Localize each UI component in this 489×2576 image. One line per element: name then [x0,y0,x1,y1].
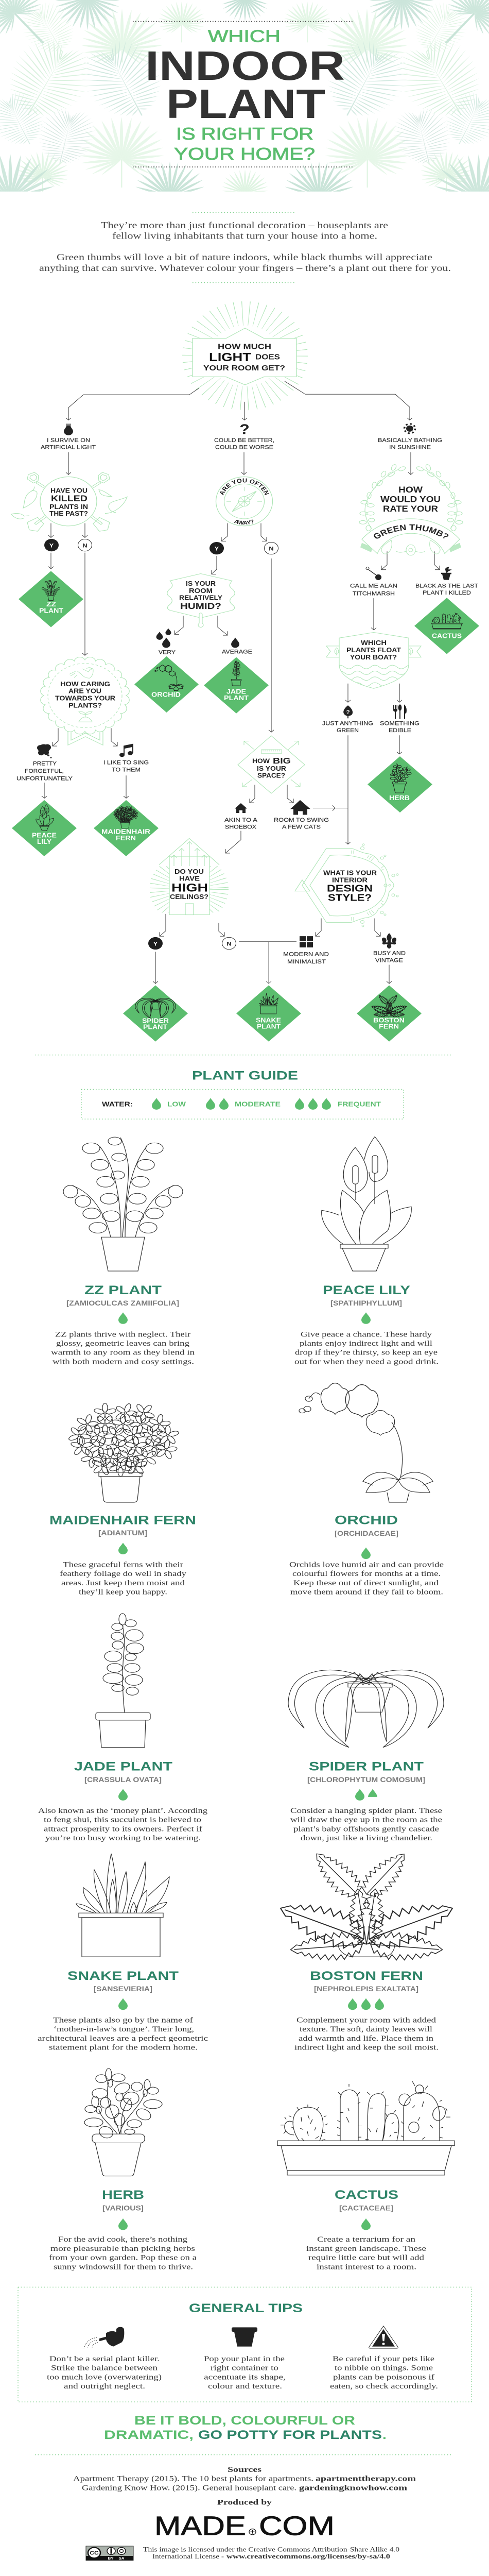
plant card: herb: from your own garden. Pop these on a [49,2253,197,2262]
plant card: spider plant: [CHLOROPHYTUM COMOSUM] [307,1776,425,1784]
plant card: peace lily: PEACE LILY [323,1283,411,1297]
yes no: often away: N [269,545,274,552]
plant card: snake plant: ‘mother-in-law’s tongue’. Their long, [54,2024,194,2033]
water legend: MODERATE [235,1100,281,1108]
question: green thumb laurel [359,464,463,555]
plant card: orchid: [ORCHIDACEAE] [335,1530,398,1538]
plant card: herb: HERB [102,2188,144,2201]
plant card: snake plant: architectural leaves are a perfect geometric [38,2033,208,2043]
plant card: peace lily [294,1137,439,1366]
plant card: ZZ plant: with both modern and cosy settings. [53,1357,194,1366]
flowchart [11,301,479,1042]
license badge: BY [108,2556,114,2561]
sources: Sources [228,2466,261,2474]
result: orchid: ORCHID [151,691,181,698]
option: could be better [214,421,274,451]
question: how big is your space [238,736,305,793]
result: boston fern: BOSTON [373,1016,405,1024]
result: snake plant: PLANT [257,1023,281,1030]
option: black as the last plant: PLANT I KILLED [423,589,471,596]
tip: watering: and outright neglect. [64,2381,145,2391]
plant card: spider plant: will draw the eye up in the room as the [290,1815,442,1824]
tip: container: accentuate its shape, [204,2372,286,2381]
option: something edible [380,704,420,734]
question: how caring badge: TOWARDS YOUR [55,694,115,702]
plant card: boston fern [273,1846,460,2052]
tip: watering: Strike the balance between [51,2363,158,2372]
tip: watering [47,2327,162,2391]
question: how much light: LIGHT [209,351,252,364]
plant card: jade plant: to feng shui, this succulent is believed to [44,1815,201,1824]
plant card: orchid [289,1383,444,1596]
title: PLANT [166,81,325,127]
plant card: cactus: require little care but will add [308,2253,424,2262]
question: are you often away compass: ARE YOU OFTEN [220,478,269,496]
plant card: spider plant: down, just like a living chandelier. [301,1833,432,1842]
plant card: ZZ plant: ZZ plants thrive with neglect. Their [55,1330,191,1338]
option: call me Alan Titchmarsh [350,567,397,597]
option: modern and minimalist [283,936,329,965]
question: how much light: DOES [255,353,280,361]
plant card: orchid: ORCHID [335,1513,398,1527]
result: jade plant: JADE [226,688,246,695]
plant card: cactus: CACTUS [335,2188,398,2201]
option: busy and vintage: VINTAGE [375,957,403,963]
question: killed plants with shovels: HAVE YOU [50,487,88,494]
plant card: peace lily: [SPATHIPHYLLUM] [330,1299,402,1307]
title: INDOOR [145,43,345,89]
plant card: peace lily: plants enjoy indirect light and will [300,1338,433,1347]
option: busy and vintage [373,933,406,963]
question: how caring badge: HOW CARING [60,680,110,688]
closing slogan: BE IT BOLD, COLOURFUL OR [134,2413,355,2428]
option: artificial light: I SURVIVE ON [47,437,90,444]
plant card: orchid: colourful flowers for months at a time. [292,1569,441,1578]
question: killed plants with shovels: THE PAST? [49,510,88,517]
title: IS RIGHT FOR [176,125,313,144]
yes no: high ceilings: N [226,940,232,947]
result: herb [368,756,432,812]
result: peace lily: LILY [37,838,51,845]
plant card: peace lily: out for when they need a good drink. [294,1357,439,1366]
header: palm leaf backdrop [0,0,489,216]
question: is your room humid: ROOM [189,587,213,595]
question: are you often away compass: AWAY? [234,519,253,524]
plant card: cactus: Create a terrarium for an [317,2234,415,2244]
tip: pets warning: eaten, so check accordingly. [330,2381,438,2391]
plant card: cactus [277,2081,455,2271]
option: pretty forgetful [16,744,73,782]
option: sing to them: TO THEM [112,766,141,773]
result: spider plant: PLANT [143,1023,168,1030]
plant card: maidenhair fern: areas. Just keep them moist and [61,1578,185,1587]
option: room to swing a few cats: ROOM TO SWING [274,817,329,823]
connector arrows [42,381,440,984]
plant card: boston fern: indirect light and keep the soil moist. [294,2042,439,2052]
plant card: snake plant: These plants also go by the name of [53,2015,194,2024]
option: just anything green: JUST ANYTHING [322,720,373,726]
option: call me Alan Titchmarsh: CALL ME ALAN [350,582,397,589]
logo: MADE.COM [154,2511,335,2540]
plant card: herb: For the avid cook, there’s nothing [58,2234,187,2244]
plant card: maidenhair fern [49,1399,196,1596]
plant card: orchid: Keep these out of direct sunlight, and [293,1578,439,1587]
question: how much light: YOUR ROOM GET? [203,364,285,372]
option: pretty forgetful: PRETTY [33,760,57,767]
tip: watering: too much love (overwatering) [47,2372,162,2381]
plant card: maidenhair fern: MAIDENHAIR FERN [49,1513,196,1527]
question: green thumb laurel: RATE YOUR [383,504,438,514]
plant card: boston fern: Complement your room with added [296,2015,436,2024]
yes no: often away: Y [215,545,219,552]
question: interior design style: WHAT IS YOUR [323,869,377,876]
question: killed plants with shovels [11,472,127,531]
question: how much light [193,313,296,398]
question: interior design style: INTERIOR [332,876,368,884]
question: how big is your space: HOW [252,757,270,765]
plant card: boston fern: texture. The soft, dainty leaves will [300,2024,432,2033]
option: very humid [156,629,176,655]
plant card: snake plant: [SANSEVIERIA] [94,1985,152,1993]
question: is your room humid: RELATIVELY [179,594,223,601]
license badge: CC [90,2550,99,2556]
question: interior design style [295,844,398,927]
option: just anything green: GREEN [337,727,359,734]
plant card: cactus: instant green landscape. These [306,2244,426,2253]
result: spider plant: SPIDER [142,1017,169,1024]
yes no: high ceilings: Y [153,940,158,947]
yes no: killed plants: N [82,542,88,549]
heading: general tips: GENERAL TIPS [189,2301,303,2315]
title [133,22,354,167]
tip: container: right container to [211,2363,278,2372]
option: average humidity: AVERAGE [222,648,252,655]
plant card: maidenhair fern: These graceful ferns with their [63,1560,184,1569]
option: call me Alan Titchmarsh: TITCHMARSH [353,590,395,597]
question: which plants float your boat: PLANTS FLOAT [346,646,401,654]
plant card: jade plant: attract prosperity to its owners. Perfect if [44,1824,203,1833]
result: ZZ plant: ZZ [46,601,56,608]
result: jade plant: PLANT [224,694,249,702]
logo: MADE.COM: COM [259,2511,335,2540]
plant card: boston fern: [NEPHROLEPIS EXALTATA] [314,1985,418,1993]
plant card: jade plant: [CRASSULA OVATA] [84,1776,162,1784]
option: akin to a shoebox: SHOEBOX [225,823,256,830]
license badge [86,2546,133,2561]
plant card: herb: sunny windowsill for them to thrive. [54,2262,193,2271]
question: green thumb laurel: WOULD YOU [380,495,441,504]
plant card: snake plant: statement plant for the modern home. [49,2042,198,2052]
plant card: snake plant: SNAKE PLANT [67,1969,179,1983]
question: is your room humid: HUMID? [180,601,221,611]
question: how big is your space: IS YOUR [257,765,286,772]
license badge: SA [118,2556,125,2561]
panel: general tips [18,2287,471,2402]
plant card: peace lily: drop if they’re thirsty, so keep an eye [295,1348,438,1357]
question: do you have high ceilings: HIGH [171,882,208,894]
water legend: FREQUENT [338,1100,381,1108]
intro text: Green thumbs will love a bit of nature indoors, while black thumbs will appreciate [57,252,432,263]
plant card: jade plant: Also known as the ‘money plant’. According [38,1806,207,1815]
question: how big is your space: SPACE? [257,771,285,779]
result: maidenhair fern: MAIDENHAIR [101,828,150,835]
intro text [39,212,451,283]
logo: MADE.COM: MADE [154,2511,246,2540]
option: bathing in sunshine: BASICALLY BATHING [378,437,442,444]
question: interior design style: DESIGN [327,884,373,894]
result: peace lily: PEACE [32,832,57,839]
question: is your room humid [167,574,235,628]
question: killed plants with shovels: KILLED [51,494,88,503]
sources: gardeningknowhow.com [299,2484,407,2492]
question: do you have high ceilings [159,838,219,915]
question: how caring badge: ARE YOU [68,687,101,695]
plant card: jade plant: JADE PLANT [74,1759,172,1773]
yes no: killed plants: Y [49,542,54,549]
sources: apartmenttherapy.com [316,2475,416,2483]
result: peace lily [12,800,77,856]
option: room to swing a few cats [274,800,329,830]
plant card: spider plant: plant’s baby offshoots gently cascade [293,1824,439,1833]
plant card: ZZ plant [51,1137,195,1366]
question: which plants float your boat [326,632,421,688]
tip: container: Pop your plant in the [204,2354,285,2363]
tip: pets warning [330,2326,438,2391]
plant card: ZZ plant: ZZ PLANT [84,1283,162,1297]
question: green thumb laurel: GREEN THUMB? [374,524,449,539]
closing slogan: GO POTTY FOR PLANTS [198,2428,382,2442]
closing slogan [104,2413,387,2442]
closing slogan: . [382,2428,387,2442]
question: how caring badge [41,657,129,745]
result: ZZ plant [19,571,83,628]
option: modern and minimalist: MINIMALIST [287,958,326,965]
water legend: WATER: [102,1100,133,1108]
option: pretty forgetful: UNFORTUNATELY [16,775,73,782]
plant card: boston fern: add warmth and life. Place them in [299,2033,433,2043]
result: snake plant: SNAKE [256,1016,281,1024]
yes no: high ceilings [148,937,236,950]
tip: container [204,2327,286,2391]
question: are you often away compass [215,476,273,527]
sources: Apartment Therapy (2015). The 10 best plants for apartments. [73,2475,313,2483]
title: WHICH [208,27,281,46]
title: YOUR HOME? [174,145,315,164]
plant card: jade plant [38,1614,207,1842]
plant card: snake plant [38,1854,208,2052]
result: maidenhair fern: FERN [116,835,136,842]
water legend [81,1089,404,1119]
question: do you have high ceilings: CEILINGS? [170,893,208,901]
result: boston fern [357,985,422,1042]
option: something edible: SOMETHING [380,720,420,726]
water legend: LOW [167,1100,186,1108]
yes no: often away [209,542,278,554]
option: bathing in sunshine: IN SUNSHINE [389,444,431,451]
plant card: ZZ plant: [ZAMIOCULCAS ZAMIIFOLIA] [66,1299,179,1307]
option: sing to them [103,744,149,773]
option: artificial light: ARTIFICIAL LIGHT [41,444,96,451]
tip: pets warning: plants can be poisonous if [333,2372,435,2381]
option: could be better: ? [239,421,250,437]
license text: This image is licensed under the Creative Commons Attribution-Share Alike 4.0 [143,2546,399,2553]
option: very humid: VERY [159,649,176,655]
question: how much light: HOW MUCH [218,343,271,351]
sources [73,2466,416,2506]
result: spider plant [123,985,188,1042]
question: how big is your space: BIG [273,756,291,766]
plant card: cactus: [CACTACEAE] [339,2204,393,2212]
intro text: fellow living inhabitants that turn your house into a home. [112,231,377,241]
plant card: jade plant: you’re too busy working to be watering. [45,1833,201,1842]
plant card: spider plant [288,1670,444,1842]
option: something edible: EDIBLE [389,727,411,734]
tip: pets warning: to nibble on things. Some [335,2363,433,2372]
tip: container: colour and texture. [208,2381,282,2391]
question: killed plants with shovels: PLANTS IN [49,503,88,511]
option: just anything green: ? [346,709,350,715]
plant card: herb [49,2069,197,2271]
plant card: herb: [VARIOUS] [102,2204,144,2212]
plant card: boston fern: BOSTON FERN [310,1969,423,1983]
option: akin to a shoebox: AKIN TO A [224,817,258,823]
option: could be better: COULD BE BETTER, [214,437,274,444]
question: do you have high ceilings: DO YOU [174,868,204,875]
option: average humidity [222,637,252,655]
plant card: peace lily: Give peace a chance. These hardy [301,1330,432,1338]
plant card: maidenhair fern: they’ll keep you happy. [79,1587,167,1596]
option: just anything green [322,705,373,734]
question: is your room humid: IS YOUR [186,580,216,587]
option: busy and vintage: BUSY AND [373,950,406,956]
result: cactus: CACTUS [432,632,462,639]
plant card: ZZ plant: glossy, geometric leaves can bring [56,1338,189,1347]
plant card: herb: more pleasurable than picking herbs [50,2244,195,2253]
plant card: orchid: move them around if they fail to bloom. [290,1587,443,1596]
plant card: maidenhair fern: [ADIANTUM] [98,1529,147,1537]
plant card: maidenhair fern: feathery foliage do well in shady [60,1569,187,1578]
license text: International License - [152,2553,224,2561]
question: interior design style: STYLE? [328,893,372,903]
intro text: They’re more than just functional decoration – houseplants are [101,220,388,230]
closing slogan: DRAMATIC, [104,2428,194,2442]
option: black as the last plant: BLACK AS THE LAST [415,582,479,589]
option: artificial light [41,423,96,451]
plant card: orchid: Orchids love humid air and can provide [289,1560,444,1569]
sources: Gardening Know How. (2015). General houseplant care. [82,2484,296,2492]
option: black as the last plant [415,567,479,596]
question: how caring badge: PLANTS? [68,701,102,709]
plant card: spider plant: Consider a hanging spider plant. These [290,1806,442,1815]
result: maidenhair fern [94,800,159,856]
intro text: anything that can survive. Whatever colour your fingers – there’s a plant out there for you. [39,263,451,274]
question: do you have high ceilings: HAVE [179,875,200,882]
option: akin to a shoebox [224,803,258,830]
option: modern and minimalist: MODERN AND [283,951,329,957]
question: green thumb laurel: HOW [398,485,423,495]
option: room to swing a few cats: A FEW CATS [282,823,321,830]
plant card: ZZ plant: warmth to any room as they blend in [51,1348,195,1357]
result: snake plant [236,985,301,1042]
heading: plant guide: PLANT GUIDE [192,1068,298,1082]
yes no: killed plants [44,539,92,551]
result: herb: HERB [389,794,410,802]
option: bathing in sunshine [378,424,442,451]
tip: watering: Don’t be a serial plant killer. [49,2354,160,2363]
option: could be better: COULD BE WORSE [215,444,273,451]
sources: Produced by [217,2498,272,2506]
tip: pets warning: Be careful if your pets like [333,2354,434,2363]
plant card: spider plant: SPIDER PLANT [309,1759,424,1773]
option: sing to them: I LIKE TO SING [103,759,149,766]
plant card: cactus: instant interest to a room. [317,2262,416,2271]
option: pretty forgetful: FORGETFUL, [25,768,64,774]
question: which plants float your boat: YOUR BOAT? [350,653,397,661]
result: cactus [414,598,479,654]
result: orchid [134,656,199,713]
license text [143,2546,399,2561]
result: boston fern: FERN [379,1023,399,1030]
result: ZZ plant: PLANT [39,607,64,614]
question: which plants float your boat: WHICH [361,639,387,647]
license text: www.creativecommons.org/licenses/by-sa/4.0 [226,2553,390,2561]
result: jade plant [204,657,269,714]
